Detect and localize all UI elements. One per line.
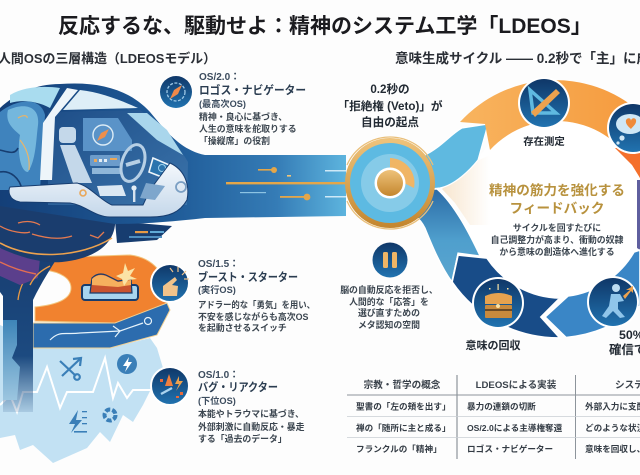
roof window <box>63 90 138 110</box>
table row one: 暴力の連鎖の切断 <box>467 400 536 412</box>
white pillar <box>40 88 78 180</box>
block: OS/1.5: を起動させるスイッチ <box>198 322 287 333</box>
cabin interior <box>48 110 188 205</box>
center text: 自己調整力が高まり、衝動の奴隷 <box>491 234 624 245</box>
block: OS/1.0: する「過去のデータ」 <box>198 433 287 444</box>
center heading: フィードバック <box>510 201 604 216</box>
segment: mid blue <box>545 250 640 338</box>
table row three: フランクルの「精神」 <box>356 443 442 454</box>
orange disc <box>35 255 169 323</box>
block: OS/1.5 <box>198 259 315 333</box>
block: OS/2.0: ロゴス・ナビゲーター <box>199 83 306 97</box>
steering wheel <box>117 142 149 184</box>
small pod under panel <box>115 221 172 243</box>
gear console <box>131 183 165 202</box>
center heading: 精神の筋力を強化する <box>489 182 625 198</box>
icon: ruler triangle <box>518 77 570 129</box>
comparison table <box>347 375 640 459</box>
table row one: 聖書の「左の頬を出す」 <box>356 400 451 412</box>
icon: bolt and scale <box>69 410 87 433</box>
icon: lightning circle <box>117 354 137 374</box>
orange sector <box>390 158 415 188</box>
heartbeat line <box>0 358 155 412</box>
orange purple nerve bundle <box>0 262 50 285</box>
text: metacognition space <box>340 284 438 330</box>
segment: orange red <box>615 148 640 178</box>
front window <box>127 113 183 155</box>
block: OS/1.0: 外部刺激に自動反応・暴走 <box>198 421 305 432</box>
text: metacognition space: 選び直すための <box>358 307 420 318</box>
label: existence measurement: 存在測定 <box>523 135 565 148</box>
cockpit hull and nerve band <box>0 83 346 224</box>
label: meaning recovery: 意味の回収 <box>466 338 520 352</box>
illustration: brain cockpit and neural stem <box>0 83 346 463</box>
table row two: OS/2.0による主導権奪還 <box>467 422 563 433</box>
icon: pause <box>372 242 408 278</box>
title: 反応するな、駆動せよ：精神のシステム工学「LDEOS」 <box>58 15 592 38</box>
side monitor <box>149 158 174 179</box>
brain veins <box>0 222 112 254</box>
flow arrow <box>50 318 152 340</box>
table row three <box>356 443 640 454</box>
table row two <box>356 422 640 433</box>
dashboard panel <box>90 155 120 174</box>
label: fifty percent <box>609 328 640 357</box>
body indicators <box>80 182 186 196</box>
heading: three-layer model: 人間OSの三層構造（LDEOSモデル） <box>0 51 216 66</box>
block: OS/1.0 <box>198 370 305 444</box>
center text: から意味の創造体へ進化する <box>499 246 615 257</box>
table row one <box>356 400 640 412</box>
rocker switch <box>82 263 138 300</box>
segment: light blue swoosh <box>422 124 488 190</box>
icon: broken gear <box>104 410 116 420</box>
text: metacognition space: 人間的な「応答」を <box>349 296 429 307</box>
block: OS/2.0: 人生の意味を舵取りする <box>199 123 297 134</box>
block: OS/1.5: OS/1.5： <box>198 259 239 270</box>
band speed lines <box>226 167 346 200</box>
neural stem <box>0 237 70 412</box>
block: OS/2.0: 精神・良心に基づき、 <box>199 111 287 122</box>
block: OS/1.0: バグ・リアクター <box>198 380 278 394</box>
navigation screen <box>83 118 132 151</box>
block: OS/1.0: 本能やトラウマに基づき、 <box>198 408 304 419</box>
center text <box>491 222 624 257</box>
icon: compass <box>160 76 192 108</box>
icon: crossed tools <box>60 358 81 380</box>
text: metacognition space: 脳の自動反応を拒否し、 <box>340 284 438 295</box>
callout: veto <box>338 82 443 129</box>
center heading <box>489 182 625 216</box>
text: metacognition space: メタ認知の空間 <box>358 319 420 330</box>
block: OS/1.5: アドラー的な「勇気」を用い、 <box>198 299 315 310</box>
table row two: 禅の「随所に主と成る」 <box>356 422 451 433</box>
callout: veto: 「拒絶権 (Veto)」が <box>338 99 443 113</box>
block: OS/2.0 <box>199 72 306 146</box>
callout: veto: 自由の起点 <box>361 115 419 129</box>
left brain lobes <box>0 87 60 190</box>
block: OS/1.5: 不安を感じながらも高次OS <box>198 311 309 322</box>
icon: running figure <box>587 276 639 328</box>
cream wedge <box>442 155 490 225</box>
white center <box>463 117 640 301</box>
purple lower brain <box>0 248 40 285</box>
table header <box>364 379 640 391</box>
segment: purple <box>637 180 640 250</box>
table row three: ロゴス・ナビゲーター <box>467 443 553 454</box>
table header: LDEOSによる実装 <box>476 379 557 391</box>
block: OS/1.5: ブースト・スターター <box>198 270 298 284</box>
callout: veto: 0.2秒の <box>370 82 410 96</box>
center text: サイクルを回すたびに <box>513 222 601 233</box>
white vehicle body <box>9 163 188 217</box>
block: OS/1.0: (下位OS) <box>198 395 236 406</box>
block: OS/2.0: OS/2.0： <box>199 72 240 83</box>
cycle diagram <box>405 77 640 357</box>
light blue spiky reactor zone <box>0 325 163 463</box>
stem light core <box>3 320 20 400</box>
stem orange nerve <box>18 245 55 300</box>
segment: orange arc <box>460 80 640 178</box>
icon: heart thought bubble <box>607 102 640 154</box>
block: OS/1.5: (実行OS) <box>198 284 236 295</box>
segment: blue swoosh <box>405 189 480 282</box>
seat <box>59 127 126 196</box>
dark lower brain <box>0 195 115 262</box>
gold veto dial <box>347 137 433 229</box>
blue flow band <box>33 303 170 348</box>
icon: treasure chest <box>472 277 524 329</box>
icon: bug sparks <box>151 367 189 405</box>
icon: pressing hand <box>151 264 189 302</box>
segment: navy <box>452 255 560 338</box>
block: OS/1.0: OS/1.0： <box>198 370 239 381</box>
block: OS/2.0: (最高次OS) <box>199 98 246 109</box>
table header: 宗教・哲学の概念 <box>364 379 441 391</box>
block: OS/2.0: 「操縦席」の役割 <box>199 135 270 146</box>
